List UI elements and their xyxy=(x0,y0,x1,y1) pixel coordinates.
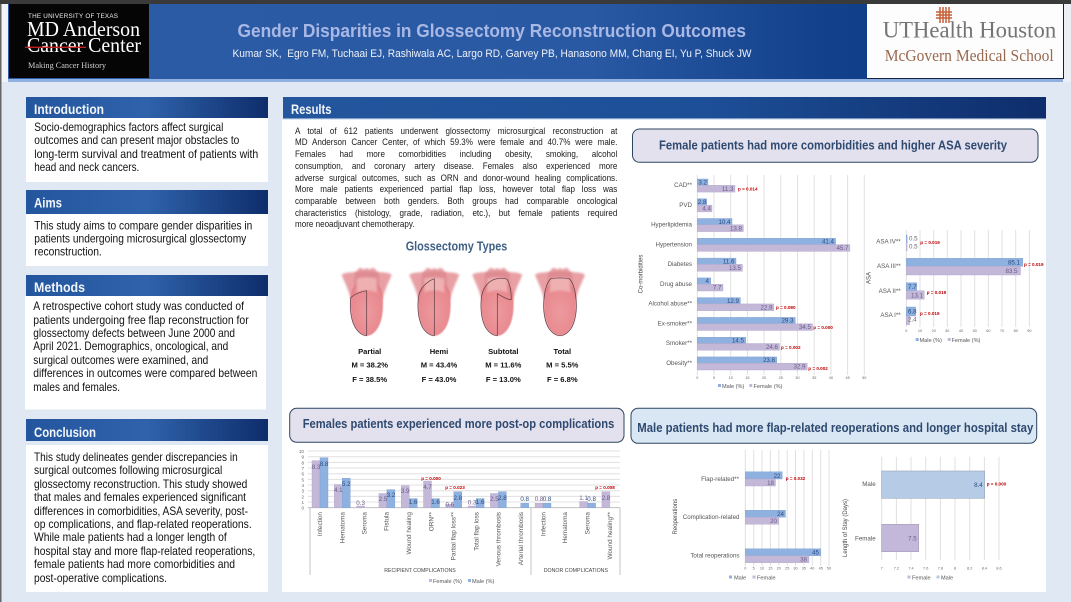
bar chart: ASA severity: p = 0.019 xyxy=(920,311,940,316)
column chart: post-op complications: Arterial thrombosis xyxy=(518,512,525,565)
column chart: post-op complications: Hematoma xyxy=(339,512,346,543)
column chart: post-op complications: 0.8 xyxy=(520,496,530,503)
bar chart: ASA severity: 7.7 xyxy=(908,284,917,291)
bar chart: comorbidities: 20 xyxy=(762,376,766,380)
bar chart: comorbidities: 4.4 xyxy=(702,206,712,213)
logo: MD Anderson Cancer Center: Cancer Center xyxy=(27,33,141,57)
bar chart: ASA severity: 50 xyxy=(973,329,977,333)
text: aims body xyxy=(34,218,252,258)
column chart: post-op complications: ORN** xyxy=(429,511,436,531)
column chart: post-op complications: 8.8 xyxy=(320,461,329,468)
text: conclusion body: op complications, and flap-related reoperations. xyxy=(34,517,252,531)
bar chart: reoperations: 45 xyxy=(812,550,820,557)
title: Gender Disparities in Glossectomy Reconstruction Outcomes xyxy=(238,20,746,41)
text: introduction body: outcomes and can present major obstacles to xyxy=(34,133,240,147)
bar chart: reoperations: p = 0.032 xyxy=(786,476,806,481)
text: conclusion body: glossectomy reconstruction. This study showed xyxy=(34,477,247,491)
bar chart: comorbidities: Hypertension xyxy=(656,241,693,248)
text: A total of 612 patients underwent glossectomy microsurgical reconstruction at xyxy=(295,125,617,136)
logo: MD Anderson Cancer Center: Making Cancer History xyxy=(28,61,106,70)
figure: subtotal glossectomy: F = 13.0% xyxy=(486,375,521,384)
text: methods body: surgical outcomes were examined, and xyxy=(33,353,208,367)
text: More male patients experienced partial flap loss, however total flap loss was xyxy=(295,183,617,194)
bar chart: comorbidities: Drug abuse xyxy=(660,281,693,288)
bar chart: ASA severity: ASA I** xyxy=(880,312,901,319)
callout: post-op complications heading xyxy=(290,408,624,442)
figure: hemi glossectomy xyxy=(409,268,459,384)
bar chart: ASA severity: 30 xyxy=(945,329,949,333)
bar chart: ASA severity: ASA II** xyxy=(879,288,901,295)
bar chart: length of stay: 7.8 xyxy=(938,566,943,570)
bar chart: comorbidities: 0 xyxy=(696,376,698,380)
text: characteristics (histology, grade, radiation, etc.), but female patients required xyxy=(295,207,617,218)
text: aims body: This study aims to compare gender disparities in xyxy=(34,218,252,232)
figure: partial glossectomy: F = 38.5% xyxy=(352,375,387,384)
text: conclusion body: that males and females experienced significant xyxy=(34,490,247,504)
bar chart: comorbidities: p = 0.002 xyxy=(808,366,828,371)
bar chart: comorbidities: 45 xyxy=(845,376,850,380)
bar chart: reoperations: 0 xyxy=(744,566,746,570)
bar chart: ASA severity: ASA IV** xyxy=(876,238,901,246)
bar chart: reoperations: 25 xyxy=(785,566,789,570)
text: conclusion body: differences in comorbidities, ASA severity, post- xyxy=(34,504,248,518)
bar chart: reoperations: Female xyxy=(757,576,776,582)
bar chart: length of stay: Male xyxy=(941,576,953,582)
bar chart: length of stay: 8.4 xyxy=(982,566,987,570)
text: methods body xyxy=(33,299,257,394)
logo: MD Anderson Cancer Center: THE UNIVERSITY OF TEXAS xyxy=(28,13,118,20)
bar chart: reoperations: Reoperations xyxy=(673,499,679,535)
bar chart: reoperations: 20 xyxy=(770,518,778,525)
text: methods body: A retrospective cohort study was conducted of xyxy=(33,299,245,313)
bar chart: ASA severity xyxy=(866,230,1044,344)
bar chart: ASA severity: 0 xyxy=(905,329,907,333)
bar chart: ASA severity: ASA xyxy=(866,272,872,284)
callout: comorbidities heading xyxy=(632,129,1038,162)
bar chart: length of stay: 8.6 xyxy=(996,566,1002,570)
column chart: post-op complications: 4.7 xyxy=(423,484,432,491)
column chart: post-op complications: Seroma xyxy=(361,512,368,534)
authors: Kumar SK, Egro FM, Tuchaai EJ, Rashiwala AC, Largo RD, Garvey PB, Hanasono MM, Chang EI, Yu P, Shuck JW xyxy=(232,48,752,60)
text: introduction body xyxy=(34,120,258,174)
bar chart: length of stay: Length of Stay (Days) xyxy=(843,499,849,557)
column chart: post-op complications: 0.8 xyxy=(587,496,596,503)
column chart: post-op complications: 2.5 xyxy=(379,496,388,503)
bar chart: reoperations: 24 xyxy=(777,511,785,518)
column chart: post-op complications: 2.8 xyxy=(453,495,463,502)
bar chart: comorbidities: 41.4 xyxy=(822,239,835,246)
bar chart: comorbidities: 4 xyxy=(706,278,710,285)
column chart: post-op complications: 5.2 xyxy=(342,481,351,488)
bar chart: comorbidities: 24.6 xyxy=(766,344,779,351)
bar chart: length of stay: 7 xyxy=(881,566,883,570)
column chart: post-op complications xyxy=(299,449,620,585)
bar chart: comorbidities: Alcohol abuse** xyxy=(648,301,693,308)
bar chart: comorbidities: PVD xyxy=(679,202,693,209)
bar chart: reoperations: Flap-related** xyxy=(701,476,740,483)
column chart: post-op complications: Infection xyxy=(540,512,547,536)
bar chart: ASA severity: 13.1 xyxy=(911,292,924,299)
column chart: post-op complications: Hematoma xyxy=(562,512,569,543)
bar chart: ASA severity: 85.1 xyxy=(1008,260,1021,266)
figure: partial glossectomy: M = 38.2% xyxy=(351,360,388,370)
figure: partial glossectomy xyxy=(342,268,392,384)
column chart: post-op complications: 3.2 xyxy=(387,492,396,499)
bar chart: reoperations: 20 xyxy=(777,566,781,570)
bar chart: reoperations: Complication-related xyxy=(683,514,740,521)
bar chart: comorbidities: 14.5 xyxy=(732,338,745,344)
bar chart: reoperations: 38 xyxy=(800,556,808,564)
text: conclusion body: post-operative complications. xyxy=(34,571,167,585)
column chart: post-op complications: 4.1 xyxy=(334,487,343,494)
column chart: post-op complications: 2.8 xyxy=(498,495,507,502)
column chart: post-op complications: 0.8 xyxy=(543,496,552,503)
column chart: post-op complications: 6 xyxy=(301,472,304,477)
figure: partial glossectomy: Partial xyxy=(358,347,381,356)
column chart: post-op complications: Venous thrombosis xyxy=(495,512,502,566)
column chart: post-op complications: 0.3 xyxy=(356,500,365,507)
bar chart: comorbidities: 10.4 xyxy=(718,219,731,226)
bar chart: comorbidities: p = 0.000 xyxy=(813,325,833,330)
column chart: post-op complications: Fistula xyxy=(384,512,391,531)
bar chart: comorbidities: 22.9 xyxy=(760,304,773,311)
bar chart: length of stay: Female xyxy=(912,576,931,582)
column chart: post-op complications: p = 0.008 xyxy=(595,485,615,490)
bar chart: comorbidities: 11.6 xyxy=(723,258,735,265)
figure: subtotal glossectomy: Subtotal xyxy=(488,347,518,356)
column chart: post-op complications: 4 xyxy=(301,483,304,488)
bar chart: length of stay: Male xyxy=(862,481,876,488)
heading: methods: Methods xyxy=(34,279,85,295)
figure: hemi glossectomy: F = 43.0% xyxy=(422,375,457,384)
column chart: post-op complications: Seroma xyxy=(585,512,592,534)
bar chart: ASA severity: 83.5 xyxy=(1005,268,1018,275)
bar chart: reoperations xyxy=(673,450,831,582)
bar chart: ASA severity: 40 xyxy=(959,329,963,333)
bar chart: ASA severity: ASA III** xyxy=(877,263,901,270)
column chart: post-op complications: p = 0.023 xyxy=(445,485,465,490)
text: methods body: differences in outcomes were compared between xyxy=(33,366,257,380)
heading: results: Results xyxy=(291,101,332,117)
text: aims body: patients undergoing microsurgical glossectomy xyxy=(34,232,246,246)
bar chart: comorbidities: 11.3 xyxy=(722,186,734,193)
bar chart: comorbidities: 35 xyxy=(812,376,816,380)
text: introduction body: Socio-demographics factors affect surgical xyxy=(34,120,223,134)
column chart: post-op complications: Female (%) xyxy=(433,579,462,585)
bar chart: comorbidities: 15 xyxy=(745,376,750,380)
bar chart: reoperations: 35 xyxy=(802,566,806,570)
column chart: post-op complications: 3.9 xyxy=(401,488,410,495)
bar chart: reoperations: Male xyxy=(734,576,746,582)
text: results summary paragraph xyxy=(295,125,618,229)
bar chart: reoperations: 5 xyxy=(753,566,755,570)
text: methods body: males and females. xyxy=(33,380,120,394)
text: consumption, and coronary artery disease. Females also experienced more xyxy=(295,160,617,171)
column chart: post-op complications: 9 xyxy=(301,455,304,460)
text: introduction body: head and neck cancers. xyxy=(34,160,139,174)
logo: MD Anderson Cancer Center: MD Anderson xyxy=(27,17,140,41)
column chart: post-op complications: 8.3 xyxy=(312,464,321,471)
bar chart: length of stay: p = 0.000 xyxy=(987,481,1007,486)
figure: subtotal glossectomy xyxy=(472,268,522,384)
column chart: post-op complications: 7 xyxy=(301,466,304,471)
callout: reoperations and hospital stay heading xyxy=(631,408,1037,443)
bar chart: comorbidities: 13.5 xyxy=(729,265,742,272)
column chart: post-op complications: 2.5 xyxy=(490,496,499,503)
bar chart: reoperations: 40 xyxy=(810,566,814,570)
bar chart: comorbidities: p = 0.002 xyxy=(781,345,801,350)
bar chart: comorbidities: p = 0.014 xyxy=(738,186,758,192)
bar chart: length of stay: 8.4 xyxy=(974,482,983,489)
column chart: post-op complications: 1 xyxy=(301,500,304,505)
figure: hemi glossectomy: M = 43.4% xyxy=(421,360,458,370)
bar chart: comorbidities: Ex-smoker** xyxy=(658,320,693,327)
text: introduction body: long-term survival and treatment of patients with xyxy=(34,147,258,161)
figure: total glossectomy: Total xyxy=(554,347,571,356)
bar chart: comorbidities: Hyperlipidemia xyxy=(651,222,693,228)
column chart: post-op complications: Total flap loss xyxy=(473,512,480,551)
bar chart: length of stay: 7.6 xyxy=(923,566,928,570)
panel: conclusion xyxy=(26,419,268,592)
column chart: post-op complications: 3 xyxy=(301,489,304,494)
bar chart: reoperations: 50 xyxy=(827,566,831,570)
heading: conclusion: Conclusion xyxy=(34,424,96,440)
figure: hemi glossectomy: Hemi xyxy=(430,347,448,356)
callout: post-op complications heading: Females patients experienced more post-op complications xyxy=(303,416,614,431)
bar chart: length of stay xyxy=(843,457,1007,582)
bar chart: comorbidities: 10 xyxy=(729,376,733,380)
column chart: post-op complications: Partial flap loss** xyxy=(451,511,458,560)
column chart: post-op complications: 0 xyxy=(301,506,304,511)
column chart: post-op complications: 0.6 xyxy=(445,502,455,508)
column chart: post-op complications: 0.3 xyxy=(468,500,477,506)
text: conclusion body xyxy=(34,450,255,585)
bar chart: reoperations: 18 xyxy=(767,480,775,487)
logo: UTHealth Houston McGovern Medical School: UTHealth Houston xyxy=(883,18,1056,44)
column chart: post-op complications: RECIPIENT COMPLICATIONS xyxy=(384,568,456,574)
panel: results xyxy=(282,97,1046,592)
callout: comorbidities heading: Female patients had more comorbidities and higher ASA severity xyxy=(659,138,1008,152)
figure: total glossectomy: M = 5.5% xyxy=(546,360,579,370)
bar chart: ASA severity: p = 0.019 xyxy=(927,290,947,295)
logo: UTHealth Houston McGovern Medical School: McGovern Medical School xyxy=(885,46,1054,65)
panel: introduction xyxy=(26,97,268,182)
panel: methods xyxy=(25,275,268,410)
bar chart: ASA severity: 0.5 xyxy=(909,243,918,250)
bar chart: comorbidities: 5 xyxy=(713,376,715,380)
text: adverse surgical outcomes, such as ORN and donor-wound healing complications. xyxy=(295,172,617,183)
bar chart: comorbidities: Diabetes xyxy=(668,261,692,268)
bar chart: ASA severity: 0.5 xyxy=(909,235,918,242)
bar chart: comorbidities: 30 xyxy=(795,376,800,380)
bar chart: length of stay: 8 xyxy=(954,566,956,570)
bar chart: comorbidities: 29.3 xyxy=(781,318,794,325)
bar chart: ASA severity: 90 xyxy=(1027,329,1032,333)
column chart: post-op complications: 1.6 xyxy=(431,499,440,506)
column chart: post-op complications: Wound healing xyxy=(406,512,413,555)
bar chart: comorbidities: 23.8 xyxy=(763,357,776,364)
text: conclusion body: surgical outcomes following microsurgical xyxy=(34,463,222,477)
column chart: post-op complications: Male (%) xyxy=(472,579,495,585)
column chart: post-op complications: 10 xyxy=(299,449,304,454)
bar chart: comorbidities: 40 xyxy=(829,376,833,380)
column chart: post-op complications: Infection xyxy=(317,512,324,536)
bar chart: ASA severity: Female (%) xyxy=(952,338,981,344)
bar chart: ASA severity: 2.4 xyxy=(908,316,917,324)
bar chart: ASA severity: p = 0.019 xyxy=(1024,262,1044,267)
heading: aims: Aims xyxy=(34,194,62,210)
bar chart: length of stay: 7.5 xyxy=(908,536,917,542)
bar chart: reoperations: 30 xyxy=(793,566,798,570)
column chart: post-op complications: 2.8 xyxy=(602,495,611,502)
bar chart: reoperations: 45 xyxy=(819,566,823,570)
text: MD Anderson Cancer Center, of which 59.3% were female and 40.7% were male. xyxy=(295,136,617,147)
bar chart: ASA severity: 10 xyxy=(918,329,922,333)
bar chart: reoperations: 22 xyxy=(774,473,781,480)
bar chart: comorbidities: 45.7 xyxy=(836,245,849,252)
column chart: post-op complications: Wound healing** xyxy=(607,511,614,560)
bar chart: ASA severity: 20 xyxy=(932,329,936,333)
bar chart: comorbidities: 34.5 xyxy=(799,324,812,331)
bar chart: ASA severity: p = 0.019 xyxy=(920,240,940,245)
text: conclusion body: hospital stay and more flap-related reoperations, xyxy=(34,544,255,558)
column chart: post-op complications: p = 0.000 xyxy=(421,476,441,481)
bar chart: comorbidities: Male (%) xyxy=(722,384,745,390)
bar chart: length of stay: 8.2 xyxy=(967,566,972,570)
text: comparable between both genders. Both groups had comparable oncological xyxy=(295,195,617,206)
bar chart: length of stay: 7.4 xyxy=(908,566,914,570)
bar chart: reoperations: 15 xyxy=(768,566,773,570)
column chart: post-op complications: 8 xyxy=(301,460,304,465)
bar chart: comorbidities: 50 xyxy=(862,376,866,380)
text: conclusion body: While male patients had a longer length of xyxy=(34,530,227,544)
column chart: post-op complications: 0.8 xyxy=(535,496,544,503)
column chart: post-op complications: 1.6 xyxy=(409,499,418,506)
figure: total glossectomy: F = 6.8% xyxy=(547,375,578,384)
heading: introduction: Introduction xyxy=(34,101,104,117)
bar chart: comorbidities: 2.8 xyxy=(698,199,707,206)
logo: UTHealth Houston McGovern Medical School xyxy=(867,4,1064,78)
logo: MD Anderson Cancer Center xyxy=(9,4,149,78)
column chart: post-op complications: 1.6 xyxy=(476,499,485,506)
bar chart: comorbidities: 25 xyxy=(779,376,783,380)
bar chart: ASA severity: 60 xyxy=(986,329,991,333)
bar chart: comorbidities: Smoker** xyxy=(666,340,693,347)
text: methods body: patients undergoing free flap reconstruction for xyxy=(33,313,249,327)
bar chart: ASA severity: 80 xyxy=(1014,329,1018,333)
column chart: post-op complications: 2 xyxy=(301,494,304,499)
text: methods body: glossectomy defects between June 2000 and xyxy=(33,326,235,340)
bar chart: comorbidities: 12.9 xyxy=(727,298,740,305)
figure: total glossectomy xyxy=(535,268,585,384)
text: more neoadjuvant chemotherapy. xyxy=(295,218,415,229)
bar chart: ASA severity: 6.8 xyxy=(908,308,917,316)
heading: glossectomy types: Glossectomy Types xyxy=(406,238,507,254)
bar chart: length of stay: Female xyxy=(855,536,876,542)
bar chart: reoperations: Total reoperations xyxy=(690,552,740,560)
bar chart: comorbidities: CAD** xyxy=(674,182,693,189)
figure: subtotal glossectomy: M = 11.6% xyxy=(485,360,522,370)
text: Females had more comorbidities including obesity, smoking, alcohol xyxy=(295,148,617,159)
icon: UTHealth lattice xyxy=(936,7,952,23)
bar chart: comorbidities: 3.2 xyxy=(698,179,708,186)
bar chart: comorbidities xyxy=(638,175,866,390)
column chart: post-op complications: 5 xyxy=(301,477,304,482)
bar chart: comorbidities: Co-morbidities xyxy=(638,255,644,293)
bar chart: comorbidities: 13.8 xyxy=(730,225,743,232)
text: aims body: reconstruction. xyxy=(34,244,102,258)
bar chart: comorbidities: p = 0.080 xyxy=(776,305,796,310)
text: conclusion body: This study delineates gender discrepancies in xyxy=(34,450,238,464)
bar chart: comorbidities: Obesity** xyxy=(666,360,693,367)
bar chart: ASA severity: 70 xyxy=(1000,329,1004,333)
bar chart: comorbidities: 32.9 xyxy=(793,364,806,371)
bar chart: comorbidities: 7.7 xyxy=(713,285,722,292)
bar chart: length of stay: 7.2 xyxy=(894,566,899,570)
column chart: post-op complications: 1.1 xyxy=(579,495,588,502)
bar chart: ASA severity: Male (%) xyxy=(920,338,942,344)
bar chart: reoperations: 10 xyxy=(760,566,764,570)
bar chart: comorbidities: Female (%) xyxy=(754,384,783,390)
text: conclusion body: female patients had more comorbidities and xyxy=(34,557,235,571)
panel: aims xyxy=(26,190,268,266)
column chart: post-op complications: DONOR COMPLICATIONS xyxy=(544,568,608,574)
text: methods body: April 2021. Demographics, oncological, and xyxy=(33,339,228,353)
header banner xyxy=(8,4,1063,82)
